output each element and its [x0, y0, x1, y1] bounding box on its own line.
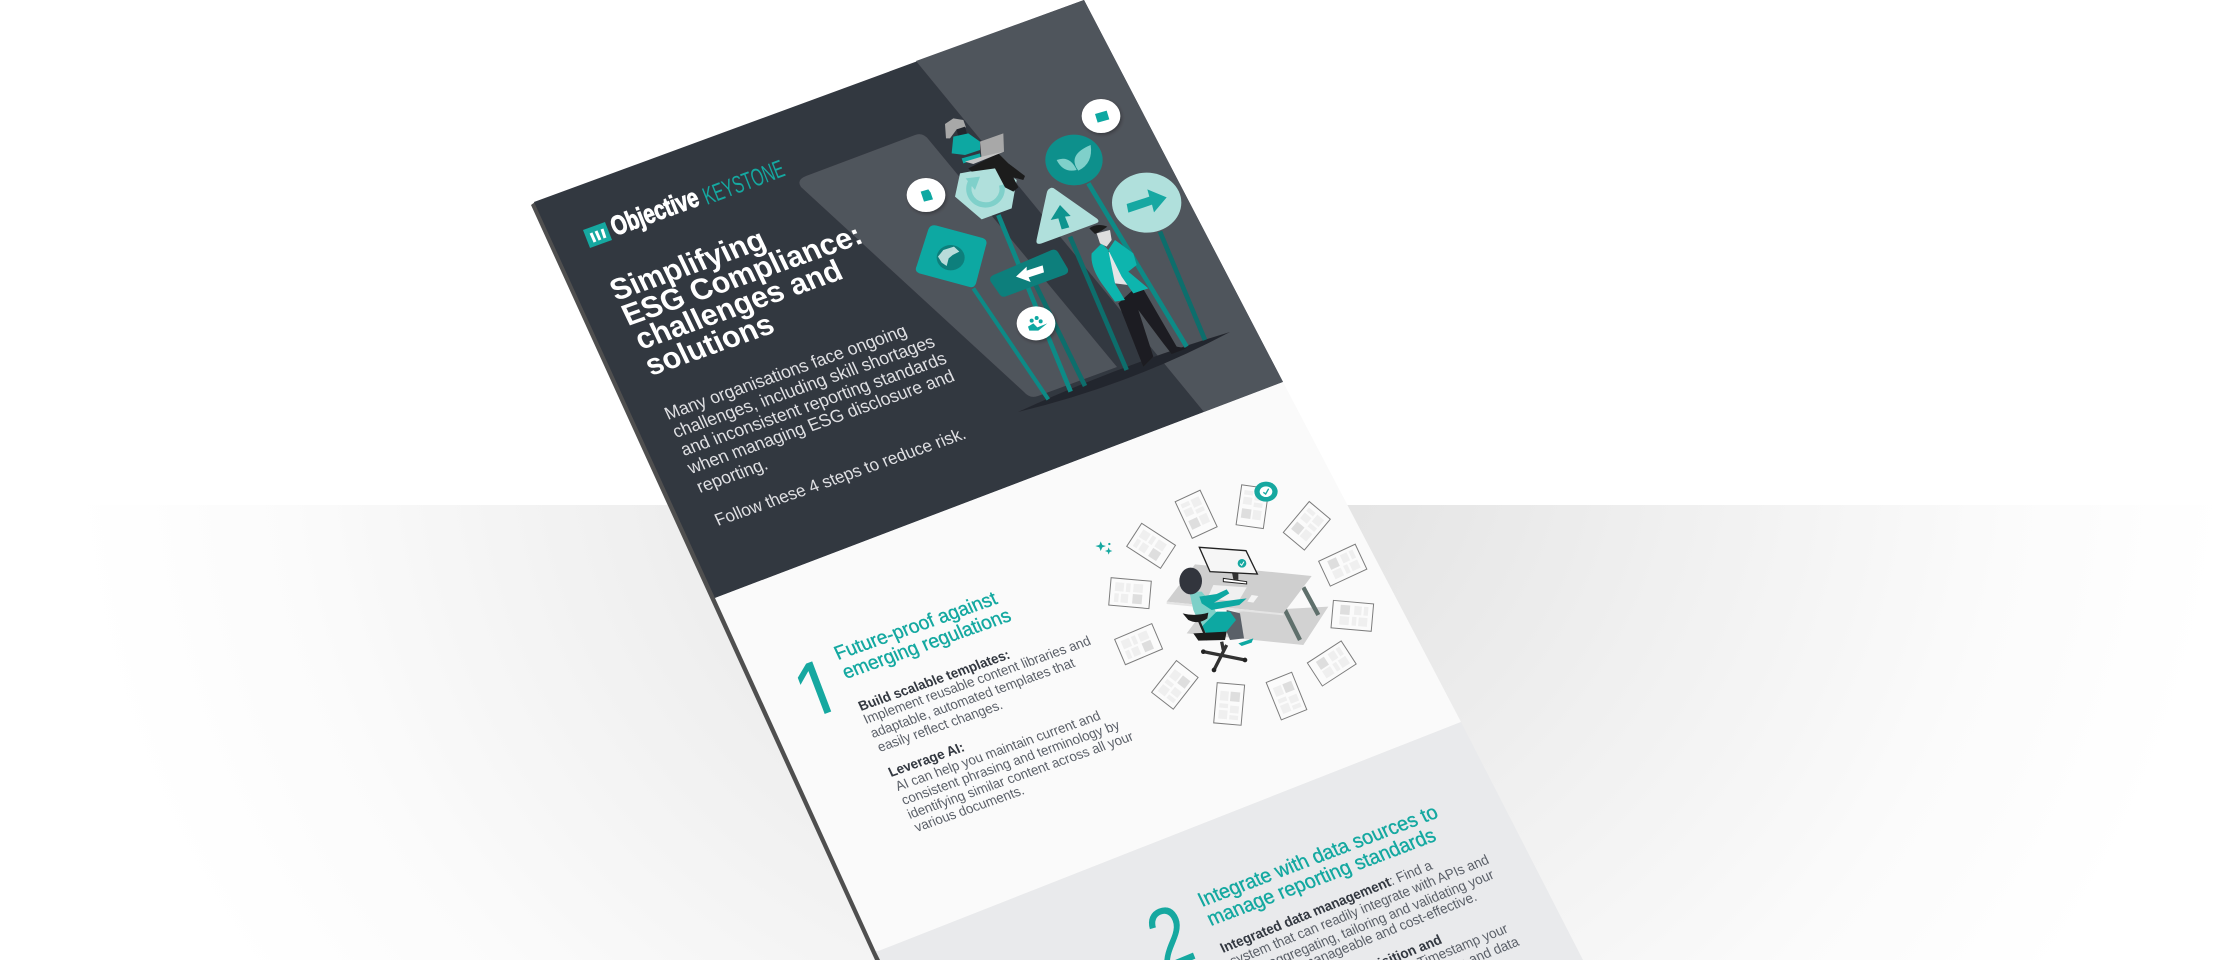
light diagonal band [916, 0, 1283, 412]
logo mark [583, 222, 612, 248]
text block: leverage AI: Leverage AI: [886, 740, 967, 780]
title: Simplifying [605, 224, 771, 307]
numeral 1: 1 [780, 637, 858, 749]
text block: leverage AI: AI can help you maintain current and [893, 708, 1103, 794]
text block: integrated data management: Integrated data management: Find a [1218, 858, 1435, 956]
heading: step 2: manage reporting standards [1203, 824, 1440, 931]
sign poles [973, 183, 1205, 399]
sign: left arrow [990, 250, 1068, 297]
documents ring [1109, 485, 1374, 725]
heading: step 2: Integrate with data sources to [1194, 801, 1442, 912]
title: ESG Compliance: [617, 219, 868, 332]
intro text: Follow these 4 steps to reduce risk. [711, 423, 969, 530]
intro text [661, 320, 969, 530]
sign: globe [916, 225, 987, 287]
title [605, 219, 868, 382]
text block: leverage AI: various documents. [912, 783, 1027, 835]
text block: leverage AI [886, 708, 1136, 835]
woman with laptop [945, 118, 1025, 192]
text block: scalable templates: adaptable, automated templates that [868, 655, 1077, 741]
title: solutions [640, 308, 779, 382]
office chair [1183, 613, 1247, 672]
sign: leaf [1045, 135, 1103, 185]
page side edge [531, 202, 881, 960]
tilted brochure mockup [531, 0, 1583, 960]
text block: scalable templates: easily reflect changes. [875, 697, 1005, 755]
intro text: challenges, including skill shortages [669, 331, 938, 442]
seated person [1179, 568, 1253, 646]
intro text: and inconsistent reporting standards [677, 348, 950, 460]
intro text: reporting. [693, 454, 771, 497]
illustration: signs and people [907, 99, 1205, 399]
icon: checklist bubble [1082, 99, 1120, 133]
sign: right arrow [1112, 173, 1181, 233]
text block: leverage AI: consistent phrasing and terminology by [899, 717, 1122, 808]
panel: step 1 [715, 382, 1461, 952]
keyboard and mouse [1207, 585, 1258, 603]
icon: check badge [1254, 482, 1278, 502]
text block: scalable templates: Implement reusable content libraries and [861, 633, 1093, 727]
background band [0, 505, 2220, 960]
intro text: Many organisations face ongoing [661, 320, 910, 424]
illustration: person at desk with documents [1095, 482, 1374, 725]
icon: hands bubble [1017, 306, 1055, 340]
text block: leverage AI: identifying similar content across all your [905, 728, 1136, 822]
desk [1167, 564, 1328, 645]
title: challenges and [630, 254, 848, 356]
ground shadow [1018, 332, 1230, 412]
sign: hexagon [955, 167, 1017, 219]
monitor [1199, 547, 1257, 584]
heading: step 1: emerging regulations [839, 605, 1015, 684]
heading: step 1: Future-proof against [831, 588, 1001, 665]
light inner shape [799, 134, 1117, 397]
logo keystone: KEYSTONE [699, 155, 789, 211]
icon: sparkles [1095, 541, 1112, 555]
icon: document bubble [907, 178, 945, 212]
panel: dark header [534, 0, 1283, 598]
sign: triangle [1036, 188, 1099, 244]
panel: step 2 [876, 722, 1583, 960]
logo [583, 155, 789, 248]
logo wordmark: Objective [607, 183, 703, 242]
intro text: when managing ESG disclosure and [683, 366, 958, 478]
text block: scalable templates: Build scalable templates: [856, 647, 1012, 714]
man with teal jacket [1089, 225, 1187, 367]
